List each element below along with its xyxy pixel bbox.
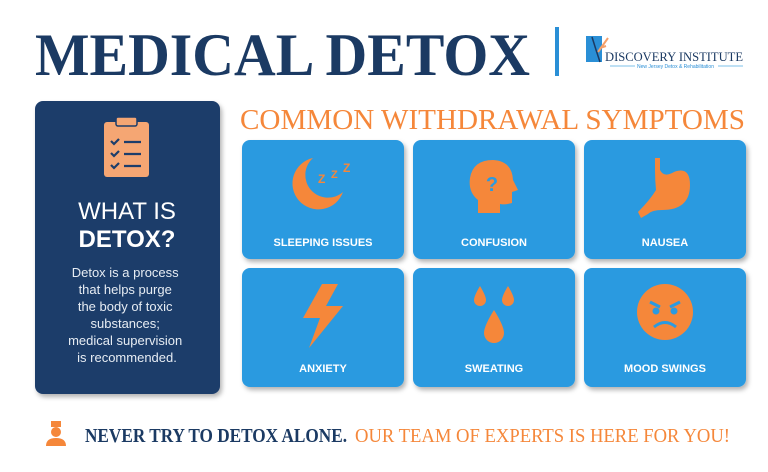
text: detox description: that helps purge bbox=[79, 282, 172, 297]
tile: mood swings bbox=[584, 268, 746, 387]
panel: what is detox: DETOX? bbox=[79, 226, 175, 253]
text: detox description: substances; bbox=[90, 316, 160, 331]
logo: Discovery Institute bbox=[586, 36, 743, 70]
text: OUR TEAM OF EXPERTS IS HERE FOR YOU! bbox=[355, 425, 730, 447]
tile: sleeping issues: SLEEPING ISSUES bbox=[273, 237, 373, 249]
text: detox description: the body of toxic bbox=[78, 299, 173, 314]
tile: sleeping issues: Z bbox=[318, 172, 325, 186]
tile: sleeping issues: Z bbox=[343, 161, 350, 175]
icon: clipboard bbox=[104, 117, 149, 177]
tile: confusion: ? bbox=[486, 174, 498, 196]
tile: sweating: SWEATING bbox=[465, 363, 523, 375]
icon: drops bbox=[474, 286, 514, 343]
icon: moon bbox=[292, 158, 343, 209]
text: detox description: is recommended. bbox=[77, 350, 177, 365]
panel: what is detox bbox=[35, 101, 220, 394]
logo: Discovery Institute: DISCOVERY INSTITUTE bbox=[605, 49, 743, 64]
title: MEDICAL DETOX bbox=[35, 22, 530, 88]
tile: mood swings: MOOD SWINGS bbox=[624, 363, 706, 375]
icon: head with question mark bbox=[470, 160, 518, 213]
footer message: NEVER TRY TO DETOX ALONE. bbox=[85, 425, 347, 447]
tile: sleeping issues bbox=[242, 140, 404, 259]
tile: sleeping issues: Z bbox=[331, 169, 338, 181]
logo: Discovery Institute: New Jersey Detox & Rehabilitation bbox=[637, 64, 714, 70]
icon: doctor bbox=[46, 421, 66, 446]
tile: anxiety: ANXIETY bbox=[299, 363, 347, 375]
text: detox description: medical supervision bbox=[68, 333, 182, 348]
icon: stomach bbox=[638, 158, 690, 218]
heading: common withdrawal symptoms: COMMON WITHDRAWAL SYMPTOMS bbox=[240, 104, 745, 136]
tile: confusion: CONFUSION bbox=[461, 237, 527, 249]
icon: angry face bbox=[637, 284, 693, 340]
text: detox description: Detox is a process bbox=[72, 265, 179, 280]
icon: lightning bbox=[303, 284, 343, 348]
tile: anxiety bbox=[242, 268, 404, 387]
tile: nausea bbox=[584, 140, 746, 259]
heading: what is detox: WHAT IS bbox=[78, 198, 176, 225]
tile: sweating bbox=[413, 268, 575, 387]
tile: confusion bbox=[413, 140, 575, 259]
tile: nausea: NAUSEA bbox=[642, 237, 688, 249]
